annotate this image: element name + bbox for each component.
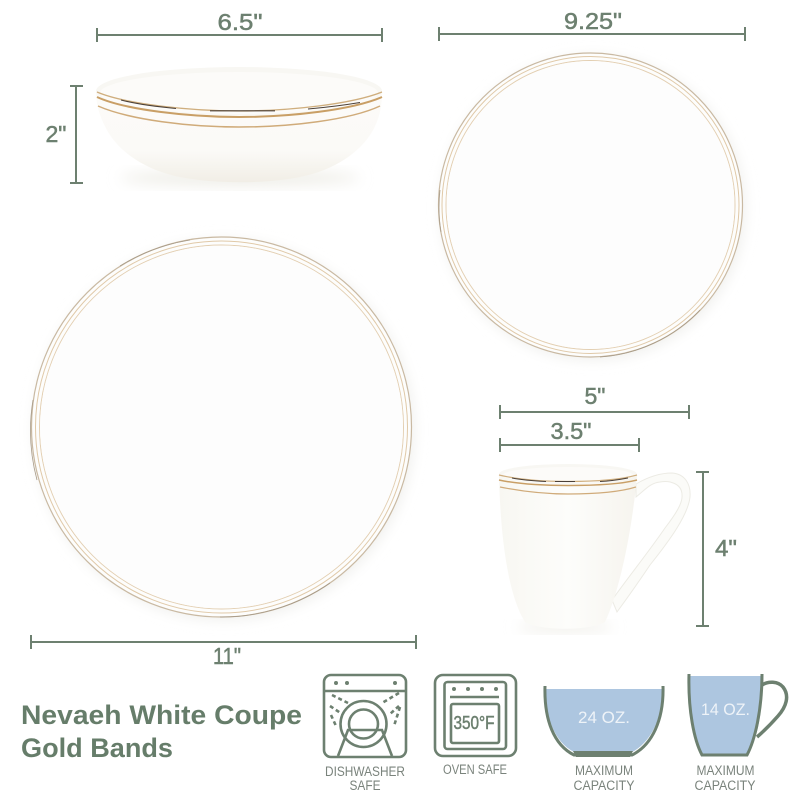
label: mug maximum capacity: CAPACITY: [694, 778, 756, 793]
icon: oven safe: [435, 675, 516, 756]
title: [21, 700, 302, 763]
bowl photo: [96, 67, 382, 186]
dimension: mug width with handle 5 inches: 5": [584, 383, 606, 409]
dimension: mug width with handle 5 inches: [500, 383, 689, 419]
dimension: small plate width 9.25 inches: 9.25": [564, 8, 622, 34]
dimension: mug rim width 3.5 inches: 3.5": [550, 418, 592, 444]
dimension: mug rim width 3.5 inches: [500, 418, 639, 452]
title: Nevaeh White Coupe: [21, 700, 302, 730]
icon: bowl 24 oz capacity: [545, 686, 663, 757]
dimension: bowl width 6.5 inches: 6.5": [218, 9, 262, 35]
icon: dishwasher safe: [324, 675, 406, 757]
dimension: large plate width 11 inches: [31, 635, 416, 669]
label: mug maximum capacity: MAXIMUM: [696, 763, 754, 778]
dimension: small plate width 9.25 inches: [439, 8, 745, 41]
label: bowl maximum capacity: [574, 763, 634, 793]
label: bowl maximum capacity: MAXIMUM: [575, 763, 633, 778]
dimension: large plate width 11 inches: 11": [213, 643, 241, 669]
label: dishwasher safe: [325, 764, 405, 793]
dimension: mug height 4 inches: [696, 472, 737, 626]
large plate photo: [30, 237, 413, 619]
icon: bowl 24 oz capacity: 24 OZ.: [578, 708, 630, 727]
label: oven safe: OVEN SAFE: [443, 762, 507, 777]
dimension: bowl width 6.5 inches: [97, 9, 382, 42]
dimension: bowl height 2 inches: [46, 86, 83, 183]
title: Gold Bands: [21, 733, 173, 763]
small plate photo: [438, 53, 744, 359]
dimension: mug height 4 inches: 4": [715, 535, 737, 561]
label: bowl maximum capacity: CAPACITY: [574, 778, 634, 793]
mug photo: [499, 464, 690, 632]
label: mug maximum capacity: [694, 763, 756, 793]
label: dishwasher safe: SAFE: [350, 778, 380, 793]
icon: oven safe: 350°F: [454, 713, 494, 733]
icon: mug 14 oz capacity: 14 OZ.: [701, 700, 750, 719]
dimension: bowl height 2 inches: 2": [46, 121, 66, 147]
label: dishwasher safe: DISHWASHER: [325, 764, 405, 779]
icon: mug 14 oz capacity: [689, 674, 787, 755]
